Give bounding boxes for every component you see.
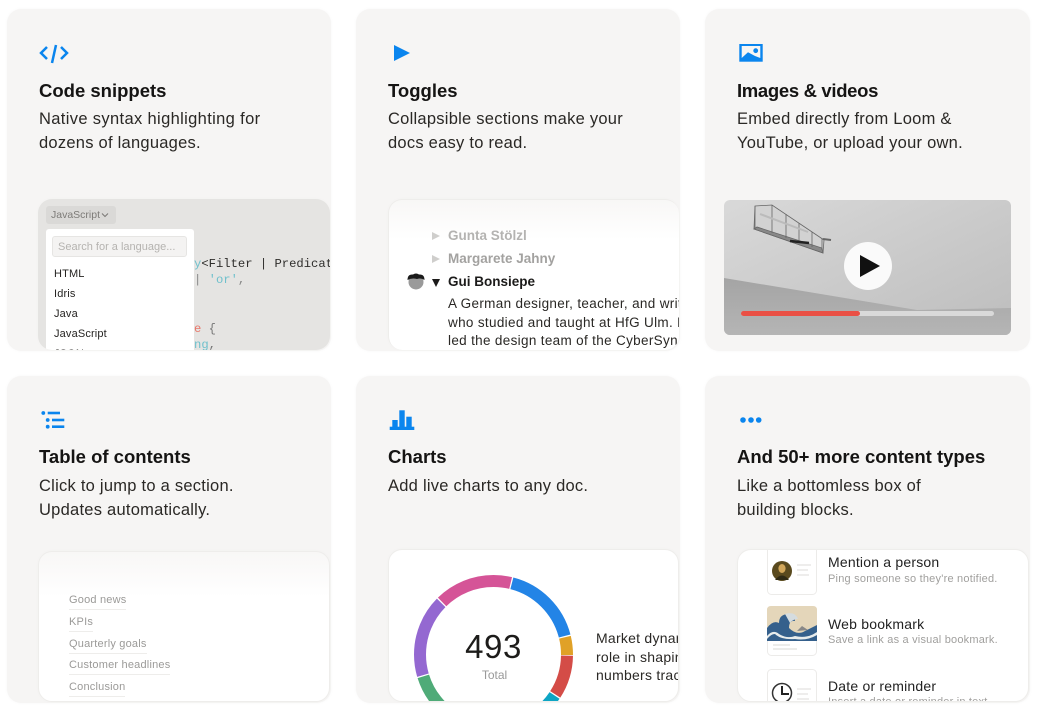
code text: e { — [194, 322, 216, 336]
link: Quarterly goals: Quarterly goals — [69, 638, 147, 650]
link: Conclusion: Conclusion — [69, 681, 125, 693]
language list: Java — [54, 308, 78, 320]
donut chart — [414, 575, 573, 701]
icon: three dots — [740, 417, 762, 423]
code text: | 'or', — [194, 273, 245, 287]
toggle: Gunta Stölzl: Gunta Stölzl — [448, 228, 527, 243]
panel: toggles — [356, 9, 680, 351]
link: KPIs: KPIs — [69, 616, 93, 628]
text: code snippets description: Native syntax highlighting for — [39, 110, 260, 128]
block thumbnail: bookmark — [767, 606, 817, 656]
text: images and videos description — [737, 110, 963, 152]
code text: y<Filter | Predicat — [194, 257, 330, 271]
panel: table of contents — [7, 376, 331, 703]
heading: toggles: Toggles — [388, 80, 458, 101]
panel: code snippets — [7, 9, 331, 351]
heading: code snippets: Code snippets — [39, 80, 166, 101]
block thumbnail: date — [767, 669, 817, 701]
language button — [46, 206, 116, 224]
code text — [194, 257, 330, 350]
text: images and videos description: YouTube, or upload your own. — [737, 134, 963, 152]
language list: Idris — [54, 288, 76, 300]
video background — [724, 200, 1011, 335]
heading: more content types: And 50+ more content types — [737, 446, 985, 467]
toggle: Gui Bonsiepe: Gui Bonsiepe — [448, 274, 535, 289]
total value: 493 — [465, 628, 522, 665]
text: toggles description: Collapsible sections make your — [388, 110, 623, 128]
language list — [54, 268, 107, 350]
toggle list mockup — [388, 199, 679, 350]
chart caption — [596, 630, 679, 683]
block subtitle: mention: Ping someone so they're notified. — [828, 573, 998, 585]
text: more content types description — [737, 477, 921, 519]
progress bar — [741, 311, 994, 316]
language list: HTML — [54, 268, 85, 280]
language button: JavaScript — [51, 209, 100, 221]
link: Good news: Good news — [69, 594, 126, 606]
panel: charts — [356, 376, 680, 703]
play button — [844, 242, 892, 290]
icon: bar chart — [390, 410, 414, 430]
language list: JavaScript — [54, 328, 107, 340]
heading: charts: Charts — [388, 446, 447, 467]
panel: more content types — [705, 376, 1030, 703]
search box: Search for a language... — [58, 241, 175, 253]
block title: mention: Mention a person — [828, 554, 939, 570]
block thumbnail: mention — [767, 550, 817, 595]
toggle body text — [448, 296, 679, 348]
icon: list — [41, 411, 64, 429]
text: table of contents description — [39, 477, 234, 519]
code editor mockup — [38, 199, 330, 350]
text: code snippets description — [39, 110, 260, 152]
link: Customer headlines: Customer headlines — [69, 659, 170, 671]
video player mockup — [724, 200, 1011, 335]
text: table of contents description: Click to jump to a section. — [39, 477, 234, 495]
chart mockup — [388, 549, 679, 702]
text: images and videos description: Embed directly from Loom & — [737, 110, 952, 128]
toggle body text: led the design team of the CyberSyn — [448, 333, 678, 348]
block title: bookmark: Web bookmark — [828, 616, 924, 632]
icon: image — [739, 44, 763, 62]
block subtitle: bookmark: Save a link as a visual bookmark. — [828, 634, 998, 646]
glider plane — [754, 205, 831, 253]
search box — [52, 236, 187, 257]
text: more content types description: Like a bottomless box of — [737, 477, 921, 495]
language dropdown — [46, 229, 194, 351]
icon: code brackets — [39, 44, 69, 64]
text: code snippets description: dozens of languages. — [39, 134, 201, 152]
text: more content types description: building blocks. — [737, 501, 854, 519]
text: toggles description: docs easy to read. — [388, 134, 527, 152]
block title: date: Date or reminder — [828, 678, 936, 694]
panel: images and videos — [705, 9, 1030, 351]
heading: table of contents: Table of contents — [39, 446, 191, 467]
contents list mockup — [38, 551, 330, 702]
total label: Total — [482, 668, 507, 682]
icon: play triangle — [394, 45, 410, 61]
block list mockup — [737, 549, 1029, 702]
text: toggles description — [388, 110, 623, 152]
text: table of contents description: Updates automatically. — [39, 501, 210, 519]
toggle: Margarete Jahny: Margarete Jahny — [448, 251, 555, 266]
text: charts description: Add live charts to any doc. — [388, 477, 588, 495]
heading: images and videos: Images & videos — [737, 80, 878, 101]
avatar — [408, 274, 424, 290]
